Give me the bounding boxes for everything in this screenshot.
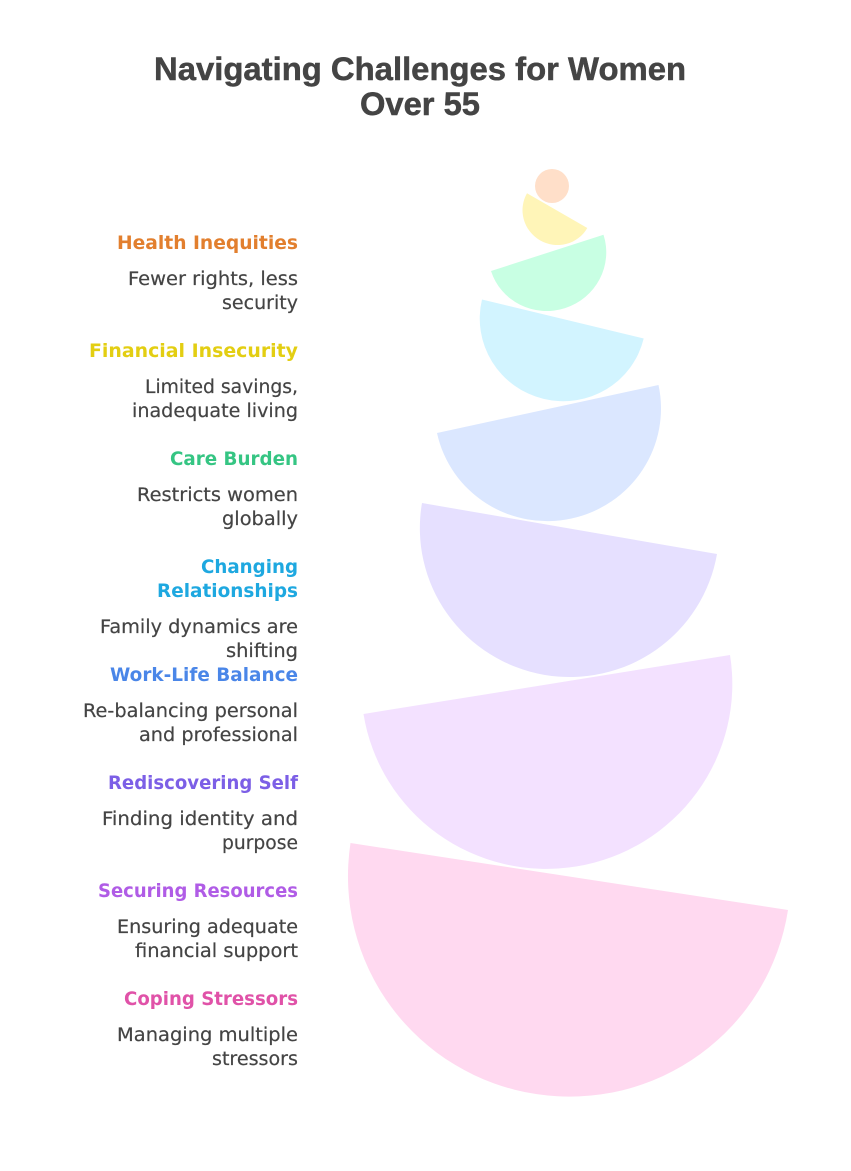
shape: Care Burden bowl — [491, 235, 606, 311]
label: Rediscovering Self — [102, 772, 299, 854]
label: Health Inequities: Fewer rights, less — [128, 269, 298, 290]
label: Work-Life Balance — [83, 664, 298, 746]
label: Care Burden: Care Burden — [170, 448, 298, 470]
title — [154, 51, 686, 122]
label: Health Inequities: Health Inequities — [117, 232, 298, 254]
shape: Work-Life Balance bowl — [437, 385, 661, 521]
shape: Health Inequities top circle — [535, 169, 569, 203]
label: Rediscovering Self: purpose — [222, 833, 298, 854]
label: Health Inequities: security — [222, 293, 298, 314]
shape: Rediscovering Self bowl — [420, 503, 717, 677]
label: Coping Stressors — [117, 988, 298, 1070]
label: Financial Insecurity: Limited savings, — [145, 377, 298, 398]
stacked balancing shapes chart — [348, 169, 788, 1097]
label: Securing Resources: financial support — [135, 941, 298, 962]
label: Changing Relationships: Relationships — [157, 580, 298, 602]
label: Rediscovering Self: Finding identity and — [102, 809, 298, 830]
label: Securing Resources — [98, 880, 298, 962]
label: Financial Insecurity: inadequate living — [132, 401, 298, 422]
label: Coping Stressors: Managing multiple — [117, 1025, 298, 1046]
label: Changing Relationships: Changing — [201, 556, 298, 578]
label: Care Burden — [137, 448, 298, 530]
shape: Coping Stressors bowl — [348, 843, 788, 1097]
title: Over 55 — [360, 86, 480, 122]
label: Changing Relationships: shifting — [226, 641, 298, 662]
label: Changing Relationships: Family dynamics are — [100, 617, 298, 638]
label: Work-Life Balance: Re-balancing personal — [83, 701, 298, 722]
label: Health Inequities — [117, 232, 298, 314]
title: Navigating Challenges for Women — [154, 51, 686, 87]
label: Rediscovering Self: Rediscovering Self — [108, 772, 299, 794]
label: Care Burden: globally — [222, 509, 298, 530]
label: Changing Relationships — [100, 556, 298, 662]
shape: Financial Insecurity bowl — [523, 193, 587, 245]
shape: Securing Resources bowl — [364, 655, 732, 869]
label: Financial Insecurity: Financial Insecurity — [89, 340, 299, 362]
label: Coping Stressors: stressors — [212, 1049, 298, 1070]
label: Work-Life Balance: and professional — [139, 725, 298, 746]
label: Coping Stressors: Coping Stressors — [124, 988, 298, 1010]
label: Securing Resources: Ensuring adequate — [117, 917, 298, 938]
label: Work-Life Balance: Work-Life Balance — [110, 664, 298, 686]
label: Care Burden: Restricts women — [137, 485, 298, 506]
label: Securing Resources: Securing Resources — [98, 880, 298, 902]
shape: Changing Relationships bowl — [480, 300, 644, 401]
label: Financial Insecurity — [89, 340, 299, 422]
